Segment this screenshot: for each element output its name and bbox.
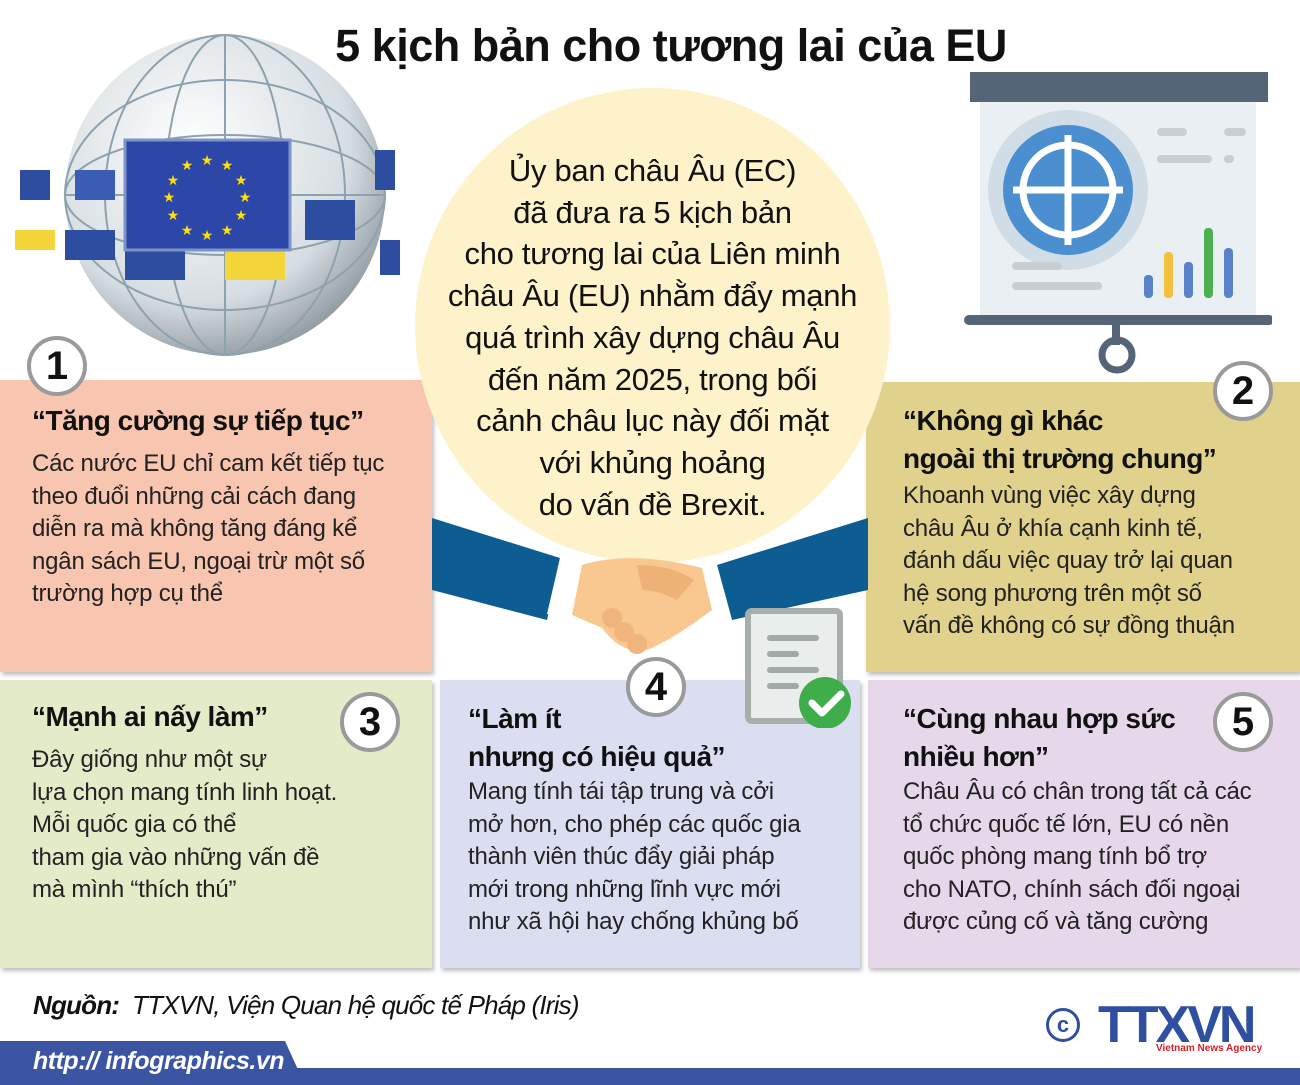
icon: globe with EU flag: ★ <box>167 172 179 188</box>
logo: c <box>1057 1012 1069 1037</box>
icon: globe with EU flag: ★ <box>221 157 233 173</box>
number 3: 3 <box>359 700 381 744</box>
text 2: châu Âu ở khía cạnh kinh tế, <box>903 514 1203 542</box>
heading 4: nhưng có hiệu quả” <box>468 741 725 772</box>
text 4: thành viên thúc đẩy giải pháp <box>468 843 774 870</box>
text 2: hệ song phương trên một số <box>903 580 1202 606</box>
icon: document check <box>745 608 851 728</box>
text 1: trường hợp cụ thể <box>32 580 223 607</box>
icon: globe with EU flag: ★ <box>239 189 251 205</box>
number 2: 2 <box>1232 369 1254 413</box>
heading 3: “Mạnh ai nấy làm” <box>32 701 268 732</box>
heading 4: “Làm ít <box>468 703 561 734</box>
heading 2: ngoài thị trường chung” <box>903 443 1216 474</box>
icon: globe with EU flag: ★ <box>167 207 179 223</box>
text 1: Các nước EU chỉ cam kết tiếp tục <box>32 450 384 477</box>
text 1: ngân sách EU, ngoại trừ một số <box>32 548 365 574</box>
number 2 <box>1213 361 1273 421</box>
heading 1: “Tăng cường sự tiếp tục” <box>32 405 364 436</box>
icon: globe with EU flag: ★ <box>181 222 193 238</box>
central text: châu Âu (EU) nhằm đẩy mạnh <box>448 278 857 313</box>
heading 2 <box>903 405 1216 474</box>
central text: Ủy ban châu Âu (EC) <box>509 153 796 188</box>
icon: presentation board <box>964 72 1272 374</box>
number 5: 5 <box>1232 700 1254 744</box>
text 4: Mang tính tái tập trung và cởi <box>468 778 774 805</box>
text 5: Châu Âu có chân trong tất cả các <box>903 778 1251 805</box>
heading 5: nhiều hơn” <box>903 741 1049 772</box>
heading 5 <box>903 703 1175 772</box>
source: Nguồn: TTXVN, Viện Quan hệ quốc tế Pháp (Iris) <box>33 990 579 1020</box>
icon: globe with EU flag: ★ <box>201 152 213 168</box>
logo: Vietnam News Agency <box>1156 1043 1262 1054</box>
logo: TTXVN <box>1098 996 1253 1054</box>
panel 4 <box>440 680 860 968</box>
central text: quá trình xây dựng châu Âu <box>465 320 840 355</box>
footer bar <box>0 1068 1300 1085</box>
text 3 <box>32 746 337 903</box>
text 5 <box>903 778 1251 935</box>
panel 2 <box>866 382 1300 672</box>
number 1: 1 <box>46 344 68 388</box>
central text <box>448 153 857 522</box>
text 2: đánh dấu việc quay trở lại quan <box>903 547 1233 574</box>
text 3: tham gia vào những vấn đề <box>32 844 319 870</box>
icon: globe with EU flag: ★ <box>201 227 213 243</box>
central text: với khủng hoảng <box>539 445 766 480</box>
text 1: theo đuổi những cải cách đang <box>32 482 356 510</box>
heading 4 <box>468 703 725 772</box>
icon: globe with EU flag <box>15 34 400 356</box>
central text: do vấn đề Brexit. <box>539 487 766 522</box>
text 3: Đây giống như một sự <box>32 746 267 773</box>
icon: globe with EU flag: ★ <box>163 189 175 205</box>
central text: cho tương lai của Liên minh <box>465 236 840 271</box>
central text: cảnh châu lục này đối mặt <box>476 403 829 438</box>
number 3 <box>340 692 400 752</box>
text 4 <box>468 778 801 935</box>
heading 2: “Không gì khác <box>903 405 1103 436</box>
text 3: mà mình “thích thú” <box>32 876 236 903</box>
panel 5 <box>868 680 1300 968</box>
number 4 <box>626 657 686 717</box>
central text: đã đưa ra 5 kịch bản <box>513 195 792 230</box>
central circle <box>415 88 890 563</box>
icon: globe with EU flag: ★ <box>235 207 247 223</box>
text 5: được củng cố và tăng cường <box>903 908 1208 935</box>
text 5: quốc phòng mang tính bổ trợ <box>903 843 1207 870</box>
number 4: 4 <box>645 665 667 709</box>
central text: đến năm 2025, trong bối <box>488 362 817 397</box>
title: 5 kịch bản cho tương lai của EU <box>335 20 1007 71</box>
icon: globe with EU flag: ★ <box>181 157 193 173</box>
text 5: tổ chức quốc tế lớn, EU có nền <box>903 810 1229 838</box>
footer url tab: http:// infographics.vn <box>33 1047 284 1075</box>
number 5 <box>1213 692 1273 752</box>
heading 5: “Cùng nhau hợp sức <box>903 703 1175 734</box>
panel 3 <box>0 680 432 968</box>
footer url tab <box>0 1041 298 1074</box>
icon: globe with EU flag: ★ <box>221 222 233 238</box>
text 4: như xã hội hay chống khủng bố <box>468 908 799 935</box>
text 4: mới trong những lĩnh vực mới <box>468 876 781 902</box>
text 2: vấn đề không có sự đồng thuận <box>903 612 1235 639</box>
panel 1 <box>0 380 432 672</box>
icon: globe with EU flag: ★ <box>235 172 247 188</box>
text 1: diễn ra mà không tăng đáng kể <box>32 515 357 542</box>
text 5: cho NATO, chính sách đối ngoại <box>903 876 1240 902</box>
number 1 <box>27 336 87 396</box>
text 3: lựa chọn mang tính linh hoạt. <box>32 778 337 806</box>
icon: handshake <box>432 518 868 654</box>
text 2: Khoanh vùng việc xây dựng <box>903 482 1196 509</box>
text 2 <box>903 482 1235 639</box>
text 1 <box>32 450 384 607</box>
text 4: mở hơn, cho phép các quốc gia <box>468 810 801 838</box>
text 3: Mỗi quốc gia có thể <box>32 811 236 838</box>
